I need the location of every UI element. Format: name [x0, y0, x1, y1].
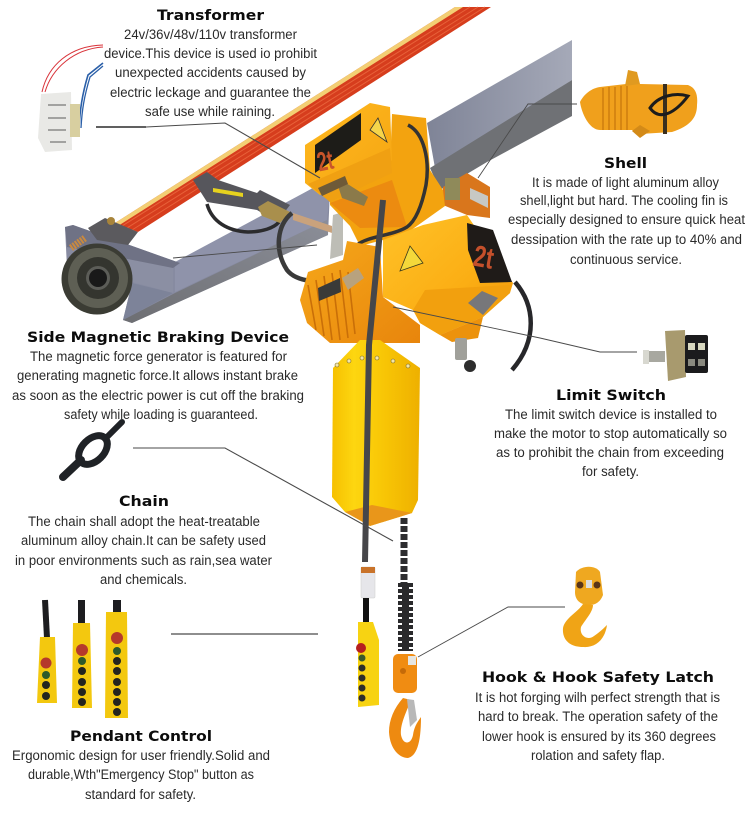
text: shell description: It is made of light aluminum alloy [532, 175, 719, 190]
text: hook description: rolation and safety flap. [531, 748, 665, 763]
icon: safety hook [563, 567, 607, 647]
heading: pendant control: Pendant Control [70, 729, 212, 745]
control box [305, 103, 392, 202]
icon: three pendant controls [37, 600, 128, 718]
pendant control in use [356, 622, 379, 707]
fin motor [300, 241, 420, 343]
heading: chain: Chain [119, 494, 169, 510]
icon: transformer [38, 45, 103, 152]
heading: limit switch: Limit Switch [556, 388, 666, 404]
text: transformer description: unexpected accidents caused by [115, 65, 306, 80]
cables [357, 125, 427, 245]
text: shell description: continuous service. [570, 252, 682, 267]
control box: 2t [314, 145, 336, 177]
text: limit switch description: as to prohibit the chain from exceeding [496, 445, 724, 460]
heading: hook and hook safety latch: Hook & Hook Safety Latch [482, 670, 714, 686]
heading: side magnetic braking device: Side Magnetic Braking Device [27, 330, 289, 346]
leader lines [96, 104, 637, 657]
load chain and spring [404, 518, 406, 651]
panel: limit switch [494, 330, 727, 479]
rear junction box [443, 173, 490, 218]
main hoist body: 2t [471, 240, 496, 276]
text: chain description: The chain shall adopt the heat-treatable [28, 514, 260, 529]
icon: chain links [63, 422, 122, 477]
central gear housing [330, 114, 445, 246]
panel: chain [15, 422, 272, 587]
text: pendant description [12, 748, 270, 802]
text: braking description [12, 349, 304, 422]
text: shell description: especially designed to ensure quick heat [508, 212, 745, 227]
panel: shell [508, 70, 745, 267]
text: limit switch description: make the motor to stop automatically so [494, 426, 727, 441]
text: pendant description: durable,Wth"Emergency Stop" button as [28, 767, 254, 782]
text: limit switch description: for safety. [582, 464, 639, 479]
panel: pendant control [12, 600, 270, 802]
heading: shell: Shell [604, 156, 647, 172]
panel: side magnetic braking device [12, 330, 304, 422]
I-beam track [65, 40, 572, 323]
text: chain description: in poor environments such as rain,sea water [15, 553, 272, 568]
text: braking description: The magnetic force generator is featured for [30, 349, 287, 364]
panel: hook and hook safety latch [475, 567, 720, 763]
rail end clamp and roller [62, 217, 138, 314]
text: hook description [475, 690, 720, 763]
icon: limit switch [643, 330, 708, 381]
text: braking description: generating magnetic force.It allows instant brake [17, 368, 298, 383]
red conductor rail [115, 7, 491, 232]
heading: transformer: Transformer [157, 8, 265, 24]
icon: motor shell [580, 70, 697, 138]
text: pendant description: standard for safety. [85, 787, 196, 802]
text: chain description: aluminum alloy chain.It can be safety used [21, 533, 266, 548]
text: shell description: shell,light but hard. The cooling fin is [520, 193, 728, 208]
chain bag [332, 340, 420, 526]
text: transformer description [104, 27, 317, 119]
text: hook description: It is hot forging wilh perfect strength that is [475, 690, 720, 705]
text: limit switch description: The limit switch device is installed to [505, 407, 717, 422]
text: hook description: lower hook is ensured by its 360 degrees [482, 729, 716, 744]
hook block and hook [389, 654, 421, 758]
text: pendant description: Ergonomic design for user friendly.Solid and [12, 748, 270, 763]
text: hook description: hard to break. The operation safety of the [478, 709, 718, 724]
text: transformer description: device.This device is used io prohibit [104, 46, 317, 61]
text: braking description: safety while loading is guaranteed. [64, 407, 258, 422]
text: chain description [15, 514, 272, 587]
text: shell description [508, 175, 745, 267]
current collector arm [193, 172, 343, 282]
text: limit switch description [494, 407, 727, 479]
pendant cable and strain box [361, 200, 383, 622]
panel: transformer [38, 8, 317, 152]
main hoist body [383, 215, 531, 372]
text: shell description: dessipation with the rate up to 40% and [511, 232, 742, 247]
text: transformer description: safe use while raining. [145, 104, 275, 119]
text: chain description: and chemicals. [100, 572, 187, 587]
hoist main illustration [62, 7, 572, 758]
text: transformer description: electric leckage and guarantee the [110, 85, 311, 100]
text: braking description: as soon as the electric power is cut off the braking [12, 388, 304, 403]
connector cylinder [318, 176, 368, 206]
text: transformer description: 24v/36v/48v/110v transformer [124, 27, 297, 42]
